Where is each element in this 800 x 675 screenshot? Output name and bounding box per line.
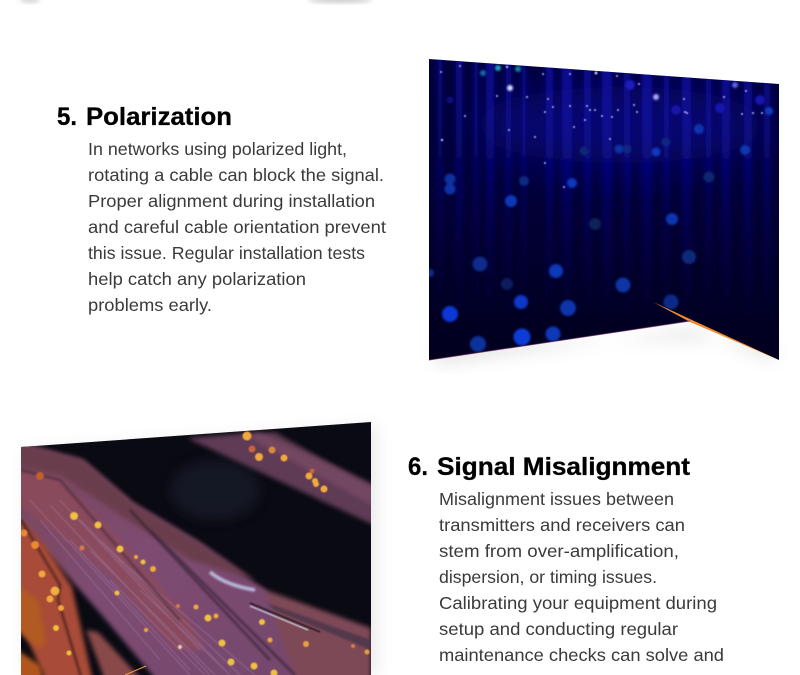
main bundle [10,440,300,675]
section 6: signal misalignment text [408,453,724,665]
glowing orange points [20,432,370,675]
orange light streak [653,302,779,360]
left orange strands [21,518,96,675]
dark backdrop tint [170,460,260,520]
section 5: polarization text [57,103,386,315]
text block: signal misalignment description: stem from over-amplification, [439,541,679,561]
text block: polarization description: In networks using polarized light, [88,139,347,159]
text block: polarization description: this issue. Regular installation tests [88,243,365,263]
image panel: blue fiber optics [426,40,779,366]
text block: signal misalignment description: dispersion, or timing issues. [439,567,657,587]
upper right strand [187,432,380,528]
text block: signal misalignment description [439,489,724,665]
text block: polarization description: help catch any polarization [88,269,306,289]
text block: signal misalignment description: Calibrating your equipment during [439,593,717,613]
text block: signal misalignment description: Misalignment issues between [439,489,674,509]
text block: polarization description: rotating a cable can block the signal. [88,165,384,185]
heading: 5. Polarization: Polarization [86,103,232,131]
orange streak [125,666,146,675]
heading: 6. Signal Misalignment: Signal Misalignment [437,453,691,481]
shadows of the image above [20,0,372,3]
heading: 5. Polarization: 5. [57,103,77,131]
silver highlight [210,572,255,590]
text block: polarization description: and careful cable orientation prevent [88,217,386,237]
text block: polarization description: Proper alignment during installation [88,191,375,211]
text block: signal misalignment description: maintenance checks can solve and [439,645,724,665]
heading: 6. Signal Misalignment: 6. [408,453,428,481]
lower fiber [86,630,142,675]
text block: polarization description: problems early. [88,295,212,315]
bokeh dots [426,65,773,352]
image panel: pink and orange fiber strands [10,422,380,675]
text block: polarization description [88,139,386,315]
lower right bundle [255,584,371,675]
text block: signal misalignment description: transmitters and receivers can [439,515,685,535]
tiny sparkles [440,65,763,188]
text block: signal misalignment description: setup and conducting regular [439,619,678,639]
